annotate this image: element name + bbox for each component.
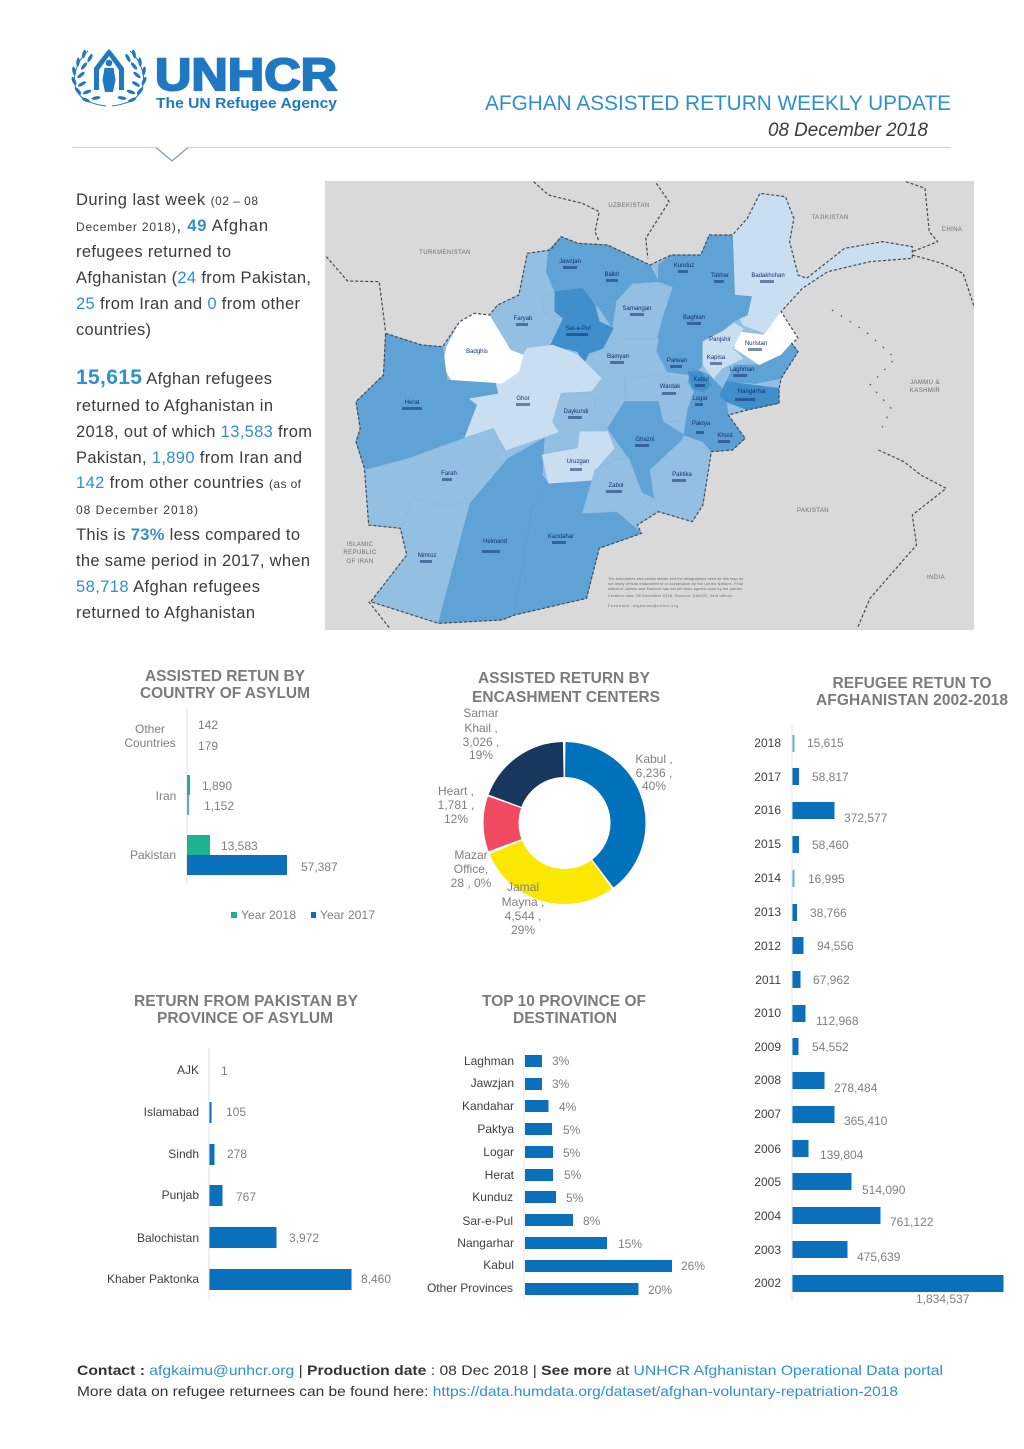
value labels: 3% (552, 1054, 570, 1068)
map province labels: Farah (441, 471, 457, 477)
donut labels: 1,781 , (438, 798, 474, 812)
value labels: 142 (198, 718, 218, 732)
map province labels: Nuristan (745, 341, 767, 347)
map disclaimer note: Feedback: afgkaimu@unhcr.org (608, 604, 678, 608)
donut labels: 6,236 , (636, 766, 672, 780)
map province labels (402, 259, 785, 563)
category labels: Pakistan (130, 848, 176, 862)
year labels: 2012 (754, 939, 781, 953)
text block: weekly summary: 142 from other countries (as of (76, 474, 302, 492)
value labels: 3,972 (289, 1231, 319, 1245)
map province labels: Laghman (729, 367, 755, 373)
heading: RETURN FROM PAKISTAN BY (134, 993, 359, 1010)
heading: AFGHANISTAN 2002-2018 (816, 692, 1008, 709)
bars (187, 775, 190, 795)
province labels: Kunduz (472, 1190, 513, 1204)
map province labels: Nangarhar (738, 389, 766, 395)
value labels (221, 1064, 391, 1286)
donut labels: Heart , (438, 784, 474, 798)
heading: TOP 10 PROVINCE OF (482, 993, 646, 1010)
value labels: 3% (552, 1077, 570, 1091)
value labels: 1 (221, 1064, 228, 1078)
map disclaimer note: The boundaries and names shown and the designations used on this map do (608, 577, 743, 581)
heading: COUNTRY OF ASYLUM (140, 685, 310, 702)
donut labels: 12% (444, 812, 468, 826)
donut labels: Khail , (464, 721, 498, 735)
donut labels: 40% (642, 779, 666, 793)
province labels: Balochistan (137, 1231, 199, 1245)
heading: REFUGEE RETUN TO (832, 675, 992, 692)
map disclaimer note: status of Jammu and Kashmir has not yet been agreed upon by the parties. (608, 587, 743, 591)
map country names: INDIA (927, 575, 945, 581)
value labels: 57,387 (301, 860, 338, 874)
province labels: Other Provinces (427, 1281, 513, 1295)
heading (134, 993, 359, 1027)
text block: weekly summary (76, 191, 312, 622)
year labels: 2004 (754, 1209, 781, 1223)
donut labels: Jamal (507, 880, 539, 894)
chart: assisted return by country of asylum (124, 668, 375, 922)
year labels: 2011 (755, 973, 781, 987)
donut labels: 29% (511, 923, 535, 937)
map country names: JAMMU & (910, 380, 940, 386)
value labels: 67,962 (813, 973, 850, 987)
year labels: 2007 (754, 1107, 781, 1121)
value labels: 139,804 (820, 1148, 864, 1162)
map province labels: Ghazni (635, 437, 655, 443)
text block: weekly summary: the same period in 2017, when (76, 552, 310, 570)
province labels: Sar-e-Pul (462, 1214, 513, 1228)
map disclaimer note: not imply official endorsement or acceptance by the United Nations. Final (608, 582, 743, 586)
map province labels: Kabul (693, 377, 709, 383)
value labels: 20% (648, 1283, 672, 1297)
map province labels: Sar-e-Pul (565, 326, 591, 332)
year labels: 2013 (754, 905, 781, 919)
footer: contact and data links (77, 1362, 943, 1399)
province labels: Islamabad (144, 1105, 199, 1119)
value labels: 16,995 (808, 872, 845, 886)
title: AFGHAN ASSISTED RETURN WEEKLY UPDATE (485, 92, 951, 115)
text block: weekly summary: Pakistan, 1,890 from Iran and (76, 449, 302, 467)
value labels: 278 (227, 1147, 247, 1161)
value labels: 15% (618, 1237, 642, 1251)
map country names: TAJIKISTAN (811, 215, 849, 221)
value labels: 54,552 (812, 1040, 849, 1054)
value labels: 4% (559, 1100, 577, 1114)
year labels: 2003 (754, 1243, 781, 1257)
donut labels: Samar (463, 706, 499, 720)
map province labels: Herat (405, 400, 420, 406)
text block: weekly summary: countries) (76, 321, 151, 339)
icon: laurel wreath with sheltering hands and person (71, 49, 147, 106)
donut labels: 19% (469, 748, 493, 762)
map province labels: Kunduz (674, 263, 694, 269)
donut labels (438, 706, 673, 937)
map province labels: Nimroz (418, 553, 436, 559)
map province labels: Badghis (466, 349, 488, 355)
category labels: Countries (124, 736, 176, 750)
province labels: Herat (485, 1168, 515, 1182)
province labels: Paktya (477, 1122, 514, 1136)
footer: contact and data links: More data on refugee returnees can be found here: https://data.humdata.org/dataset/afghan-voluntary-repatriation-2018 (77, 1383, 898, 1399)
category labels (124, 722, 176, 862)
year labels: 2002 (754, 1276, 781, 1290)
map provinces (356, 193, 912, 623)
logo tagline: The UN Refugee Agency (156, 96, 337, 112)
value labels: 38,766 (810, 906, 847, 920)
map province labels: Uruzgan (567, 459, 589, 465)
value labels: 26% (681, 1259, 705, 1273)
value labels: 1,834,537 (916, 1292, 970, 1306)
donut labels: 3,026 , (463, 735, 499, 749)
bars (525, 1055, 672, 1295)
heading (482, 993, 646, 1027)
province labels (107, 1063, 199, 1286)
map province labels: Helmand (483, 539, 507, 545)
heading: PROVINCE OF ASYLUM (157, 1010, 333, 1027)
map province labels: Wardak (660, 384, 681, 390)
value labels: 13,583 (221, 839, 258, 853)
map country names: KASHMIR (910, 388, 940, 394)
year labels: 2005 (754, 1175, 781, 1189)
value labels: 15,615 (807, 736, 844, 750)
map province labels: Zabul (608, 483, 624, 489)
donut labels: 28 , 0% (451, 876, 492, 890)
map province labels: Balkh (604, 272, 620, 278)
year labels: 2016 (754, 803, 781, 817)
map province labels: Paktya (692, 421, 711, 427)
map province labels: Faryab (514, 316, 533, 322)
province labels: AJK (177, 1063, 199, 1077)
year labels: 2006 (754, 1142, 781, 1156)
donut labels: Office, (454, 862, 488, 876)
province labels: Punjab (162, 1188, 199, 1202)
province labels: Kabul (483, 1258, 514, 1272)
heading: ENCASHMENT CENTERS (472, 689, 660, 706)
value labels: 5% (564, 1168, 582, 1182)
year labels: 2017 (754, 770, 781, 784)
category labels: Other (135, 722, 165, 736)
value labels: 475,639 (857, 1250, 901, 1264)
map country names: ISLAMIC (347, 542, 374, 548)
value labels: 372,577 (844, 811, 888, 825)
text block: weekly summary: 25 from Iran and 0 from other (76, 295, 300, 313)
map disclaimer note (608, 577, 743, 608)
heading: ASSISTED RETURN BY (478, 670, 651, 687)
province labels: Nangarhar (457, 1236, 514, 1250)
text block: weekly summary: December 2018), 49 Afghan (76, 217, 268, 235)
value labels: 94,556 (817, 939, 854, 953)
donut labels: 4,544 , (505, 909, 541, 923)
value labels: 58,817 (812, 770, 849, 784)
value labels (198, 718, 338, 874)
map province labels: Baghlan (683, 315, 705, 321)
value labels: 179 (198, 739, 218, 753)
legend: Year 2017 (320, 908, 375, 922)
province labels: Laghman (464, 1054, 514, 1068)
value labels: 365,410 (844, 1114, 888, 1128)
text block: weekly summary: returned to Afghanistan (76, 604, 255, 622)
text block: weekly summary: 58,718 Afghan refugees (76, 578, 260, 596)
panel: map of Afghanistan returns by province (325, 181, 976, 630)
map country names: PAKISTAN (797, 508, 829, 514)
map country names: CHINA (942, 227, 962, 233)
year labels: 2008 (754, 1073, 781, 1087)
chart: refugee return to Afghanistan 2002-2018 (754, 675, 1008, 1306)
text block: weekly summary: refugees returned to (76, 243, 231, 261)
map province labels: Panjshir (709, 337, 731, 343)
map country names: TURKMENISTAN (419, 250, 471, 256)
map country names (343, 203, 962, 581)
logo: UNHCR (71, 49, 337, 112)
map country names: UZBEKISTAN (608, 203, 650, 209)
province labels: Logar (483, 1145, 514, 1159)
map province labels: Takhar (711, 273, 729, 279)
map province labels: Paktika (672, 472, 692, 478)
map province labels: Kandahar (548, 534, 574, 540)
header rule with chevron (72, 148, 951, 161)
donut labels: Mazar (454, 848, 488, 862)
category labels: Iran (156, 789, 176, 803)
value labels: 1,152 (204, 799, 234, 813)
text block: weekly summary: Afghanistan (24 from Pakistan, (76, 269, 311, 287)
value labels: 5% (563, 1146, 581, 1160)
map province labels: Samangan (622, 306, 652, 312)
province labels: Sindh (168, 1147, 199, 1161)
heading (472, 670, 660, 706)
map province labels: Ghor (516, 396, 530, 402)
donut segments (501, 760, 628, 886)
year labels: 2009 (754, 1040, 781, 1054)
map province labels: Badakhshan (751, 273, 785, 279)
map province labels: Khost (717, 433, 733, 439)
value labels (552, 1054, 705, 1297)
heading: ASSISTED RETUN BY (145, 668, 306, 685)
value labels (807, 736, 970, 1306)
value labels: 278,484 (834, 1081, 878, 1095)
map province labels: Parwan (667, 358, 687, 364)
text block: weekly summary: 2018, out of which 13,583 from (76, 423, 312, 441)
year labels: 2014 (754, 871, 781, 885)
text block: weekly summary: This is 73% less compared to (76, 526, 300, 544)
text block: weekly summary: During last week (02 – 08 (76, 191, 258, 209)
report date: 08 December 2018 (768, 120, 928, 141)
map province labels: Jawzjan (559, 259, 581, 265)
legend: Year 2018 (241, 908, 296, 922)
bars (792, 735, 1004, 1292)
chart: top 10 province of destination (427, 993, 705, 1300)
year labels: 2015 (754, 837, 781, 851)
map province labels: Daykundi (563, 409, 589, 415)
value labels: 514,090 (862, 1183, 906, 1197)
value labels: 8% (583, 1214, 601, 1228)
legend (231, 908, 375, 922)
province labels: Khaber Paktonka (107, 1272, 199, 1286)
chart: return from Pakistan by province of asylum (107, 993, 391, 1300)
map province labels: Logar (692, 396, 708, 402)
province labels: Kandahar (462, 1099, 514, 1113)
value labels: 761,122 (890, 1215, 934, 1229)
map disclaimer note: Creation date: 08 December 2018. Sources: UNHCR, field offices. (608, 594, 733, 598)
map province labels: Bamyan (607, 354, 629, 360)
map country names: OF IRAN (346, 559, 374, 565)
year labels (754, 736, 781, 1290)
value labels: 58,460 (812, 838, 849, 852)
text block: weekly summary: returned to Afghanistan in (76, 397, 273, 415)
donut labels: Mayna , (502, 895, 544, 909)
value labels: 5% (566, 1191, 584, 1205)
value labels: 112,968 (816, 1014, 859, 1028)
value labels: 8,460 (361, 1272, 391, 1286)
footer: contact and data links: Contact : afgkaimu@unhcr.org | Production date : 08 Dec 2018 | See more at UNHCR Afghanistan Operational Data portal (77, 1362, 943, 1378)
province labels (427, 1054, 515, 1295)
year labels: 2010 (754, 1006, 781, 1020)
province labels: Jawzjan (471, 1076, 514, 1090)
value labels: 105 (226, 1105, 246, 1119)
value labels: 1,890 (202, 779, 232, 793)
value labels: 767 (236, 1190, 256, 1204)
text block: weekly summary: 15,615 Afghan refugees (76, 366, 272, 389)
heading (140, 668, 310, 702)
bars (210, 1102, 352, 1290)
heading (816, 675, 1008, 709)
value labels: 5% (563, 1123, 581, 1137)
text block: weekly summary: 08 December 2018) (76, 503, 198, 517)
map province labels: Kapisa (707, 355, 726, 361)
heading: DESTINATION (513, 1010, 617, 1027)
year labels: 2018 (754, 736, 781, 750)
donut labels: Kabul , (635, 752, 673, 766)
chart: donut, assisted return by encashment centers (438, 670, 673, 937)
map borders (326, 182, 976, 628)
map country names: REPUBLIC (343, 550, 377, 556)
logo wordmark: UNHCR (155, 49, 337, 100)
